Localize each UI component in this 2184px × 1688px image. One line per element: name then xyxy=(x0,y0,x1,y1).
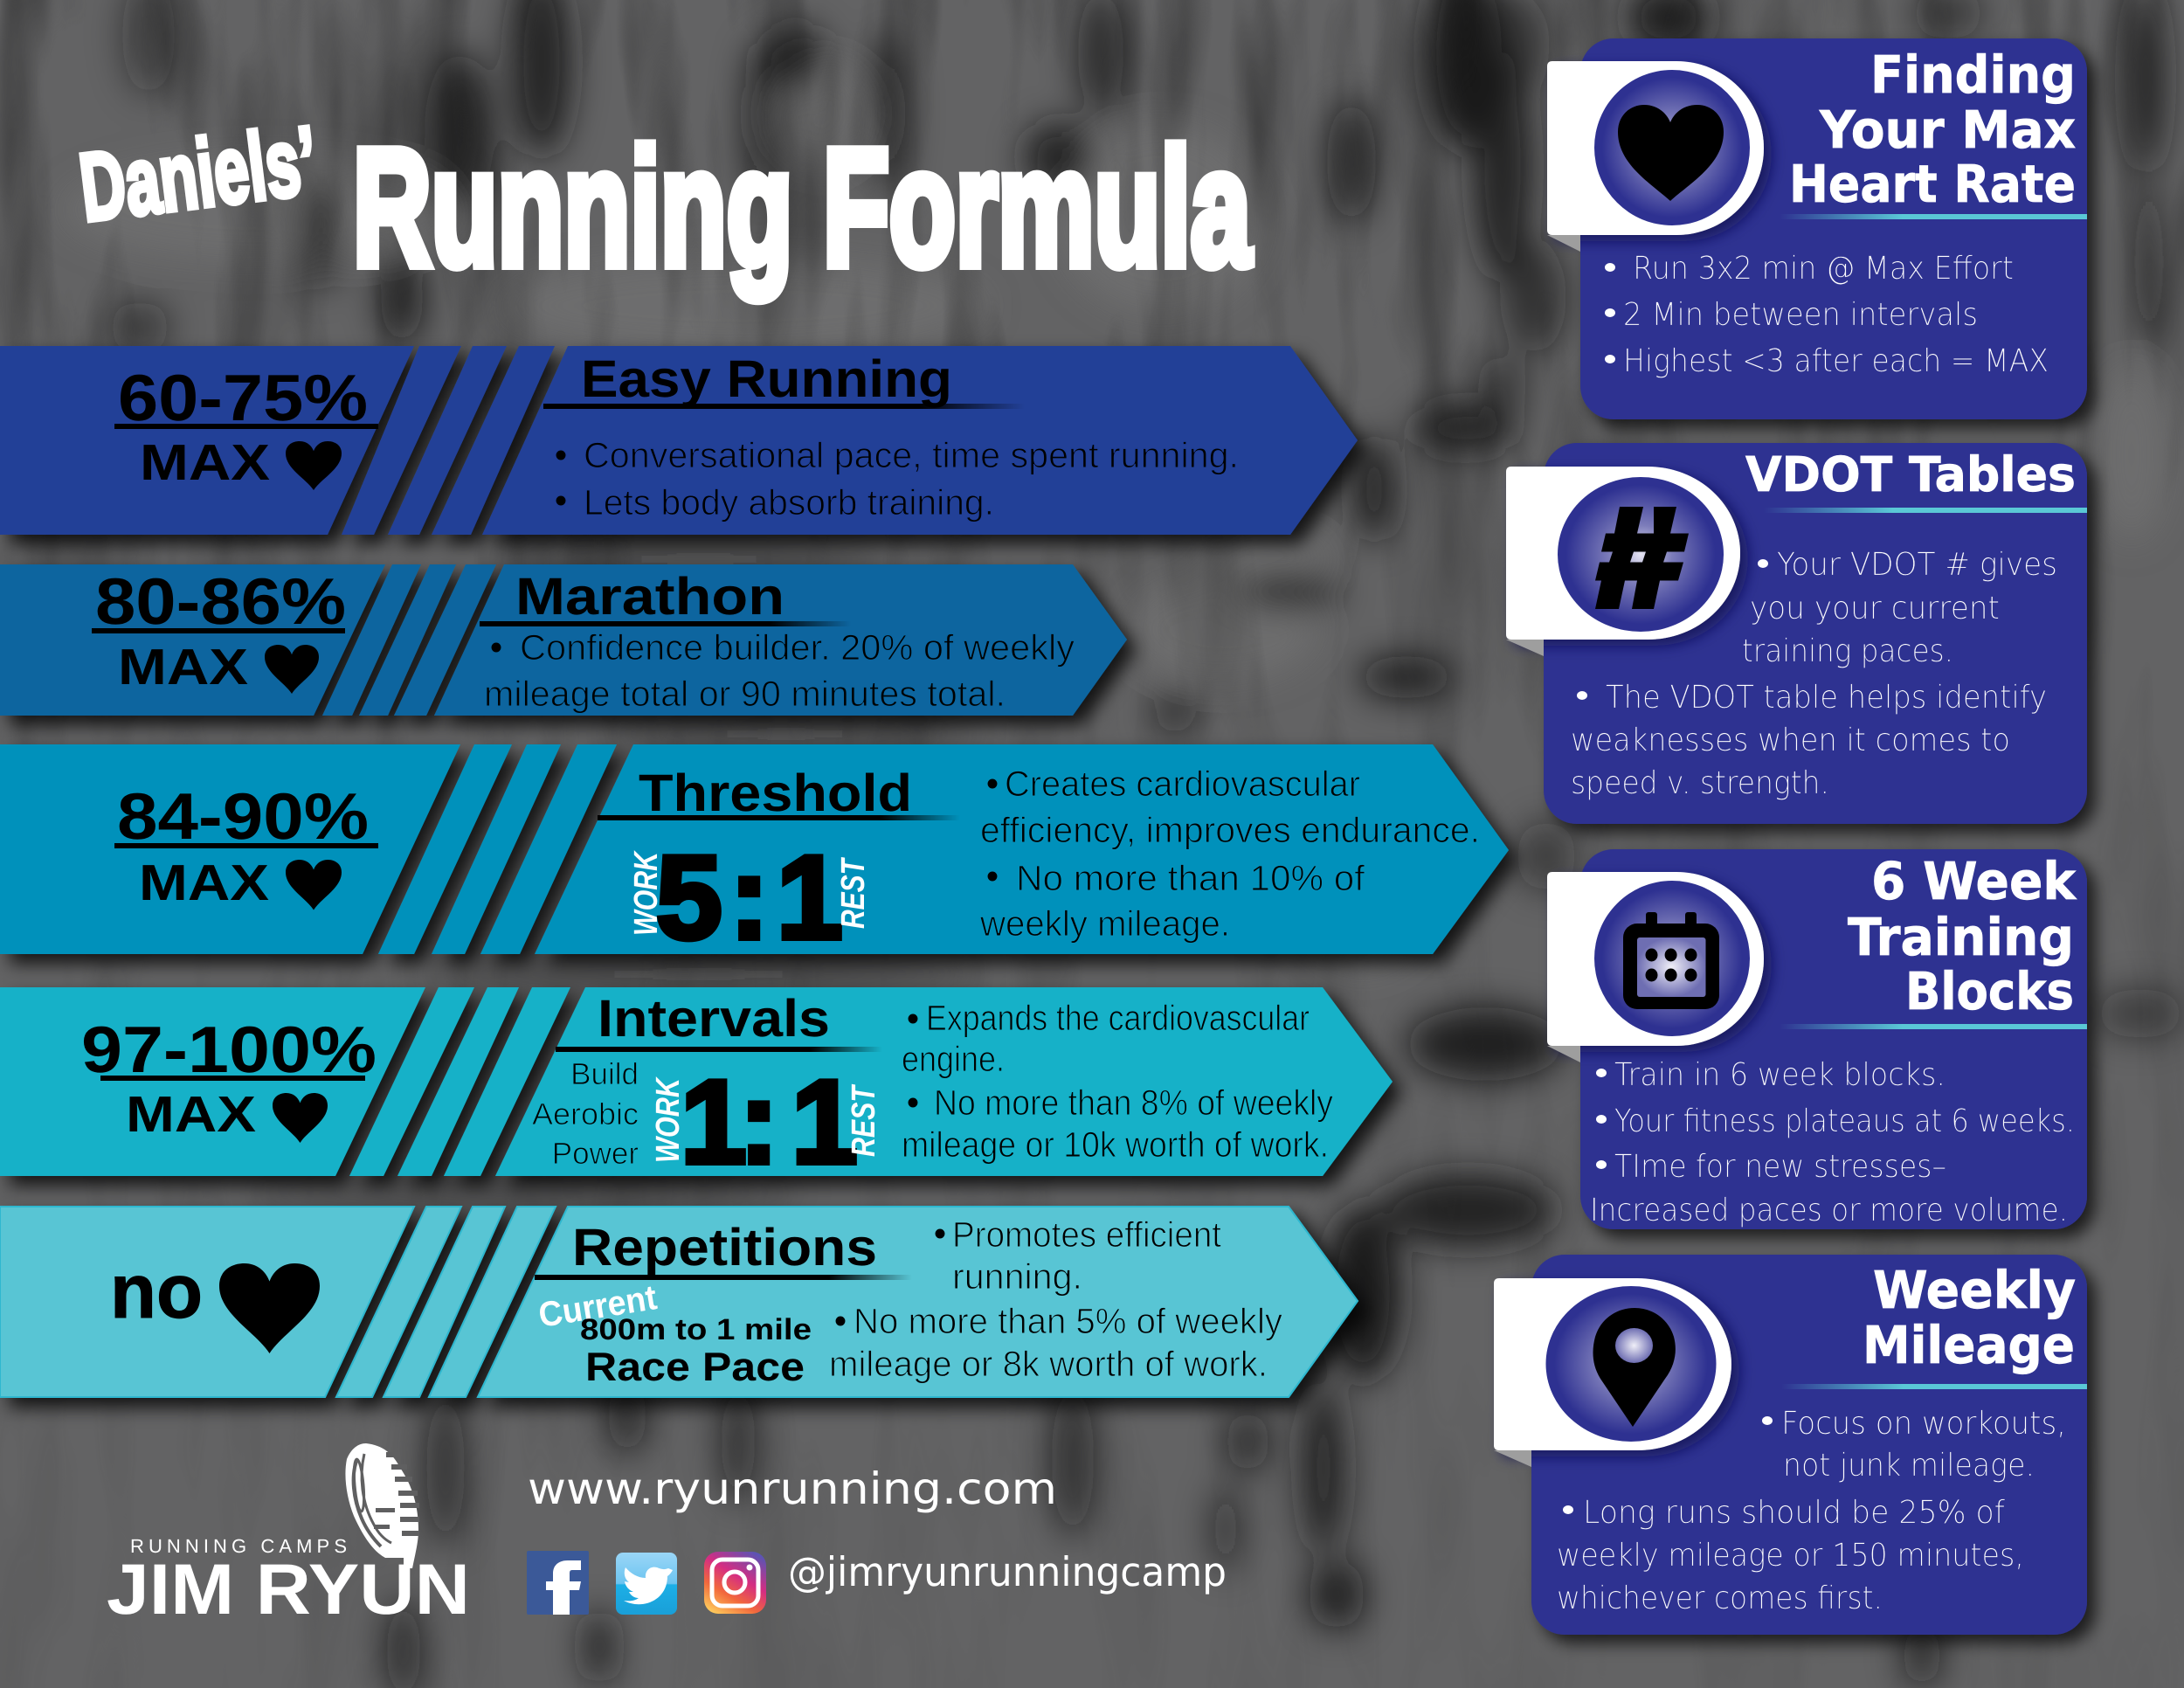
text: description: mileage or 8k worth of work. xyxy=(829,1344,1268,1384)
percentage: 60-75%: 60-75% xyxy=(118,361,368,434)
label: MAX: MAX xyxy=(126,1086,256,1143)
ratio: 5:1 work to rest: REST xyxy=(835,857,872,929)
heading xyxy=(1863,1260,2076,1375)
text: description: Your VDOT # gives xyxy=(1777,547,2057,583)
heading: Repetitions: Repetitions xyxy=(572,1218,877,1276)
panel: 6 Week Training Blocks xyxy=(1547,849,2087,1229)
text: description: TIme for new stresses– xyxy=(1614,1149,1946,1185)
percentage: 80-86%: 80-86% xyxy=(95,564,346,638)
text: description: Focus on workouts, xyxy=(1781,1406,2066,1442)
heading: Marathon: Marathon xyxy=(515,567,784,626)
label: current race pace: Current xyxy=(536,1278,660,1335)
text: description xyxy=(1571,547,2057,801)
text: description: No more than 8% of weekly xyxy=(934,1083,1333,1123)
icon: twitter xyxy=(616,1553,677,1615)
ratio: 1:1 work to rest: WORK xyxy=(650,1076,687,1163)
panel: Marathon arrow xyxy=(0,564,1127,716)
text: description xyxy=(829,1214,1282,1384)
logo: Jim Ryun Running Camps xyxy=(107,1443,470,1629)
text: description: Promotes efficient xyxy=(952,1214,1222,1255)
label: current race pace xyxy=(536,1278,812,1389)
heading: Blocks xyxy=(1905,961,2074,1021)
panel: VDOT Tables xyxy=(1506,443,2087,824)
icon: shoe sole xyxy=(345,1443,419,1568)
heading: 6 Week xyxy=(1871,851,2077,911)
panel: Repetitions arrow xyxy=(0,1207,1358,1397)
arrow shape xyxy=(0,1207,1358,1397)
label: MAX: MAX xyxy=(139,854,269,911)
heading: Mileage xyxy=(1863,1315,2075,1375)
panel: Finding Your Max Heart Rate xyxy=(1547,38,2087,419)
arrow shape xyxy=(0,987,1393,1176)
title word: Daniels': Daniels’ xyxy=(74,107,323,242)
heading xyxy=(1789,45,2076,214)
icon tab: hash xyxy=(1506,467,1740,656)
heading xyxy=(1848,851,2077,1021)
icon: facebook xyxy=(527,1551,589,1615)
panel: Easy Running arrow xyxy=(0,346,1358,535)
heading: VDOT Tables xyxy=(1745,446,2076,502)
text: description: mileage or 10k worth of work. xyxy=(902,1124,1329,1165)
text: description: No more than 5% of weekly xyxy=(854,1301,1282,1341)
text: description: Train in 6 week blocks. xyxy=(1614,1057,1946,1093)
heading: Training xyxy=(1848,907,2074,967)
text: description: speed v. strength. xyxy=(1571,765,1829,801)
text: description: Creates cardiovascular xyxy=(1005,764,1360,804)
text: description: running. xyxy=(952,1256,1082,1297)
text: description: whichever comes first. xyxy=(1557,1581,1883,1616)
text: description: efficiency, improves endurance. xyxy=(980,810,1480,850)
icon: heart xyxy=(265,645,319,694)
card xyxy=(1580,849,2087,1229)
text: description: weaknesses when it comes to xyxy=(1571,723,2010,758)
ratio: 5:1 work to rest: 5:1 xyxy=(656,831,843,964)
ratio: 1:1 work to rest: REST xyxy=(846,1084,882,1157)
text: description: Conversational pace, time spent running. xyxy=(584,435,1239,475)
text: steps: Highest <3 after each = MAX xyxy=(1623,343,2049,379)
icon tab: calendar xyxy=(1547,872,1764,1062)
label: Build Aerobic Power: Aerobic xyxy=(532,1097,639,1131)
percentage: 97-100%: 97-100% xyxy=(81,1013,377,1086)
text: description: engine. xyxy=(902,1039,1005,1079)
text: Jim Ryun: JIM RYUN xyxy=(107,1550,470,1629)
title xyxy=(74,107,1252,301)
text: description: Confidence builder. 20% of weekly xyxy=(520,627,1075,668)
arrow shape xyxy=(0,744,1509,954)
text: description: you your current xyxy=(1750,591,2000,626)
ratio: 5:1 work to rest: WORK xyxy=(628,850,665,936)
text: description xyxy=(556,435,1239,522)
card xyxy=(1544,443,2087,824)
text: description: training paces. xyxy=(1742,633,1953,669)
text: description: Lets body absorb training. xyxy=(584,482,994,522)
heading: Weekly xyxy=(1873,1260,2076,1320)
label: Build Aerobic Power: Build xyxy=(570,1057,639,1091)
panel: Threshold arrow xyxy=(0,744,1509,964)
arrow shape xyxy=(0,346,1358,535)
text: steps: 2 Min between intervals xyxy=(1623,297,1978,333)
text: Running Camps: RUNNING CAMPS xyxy=(130,1535,347,1557)
icon: instagram xyxy=(704,1552,766,1614)
icon tab: map pin xyxy=(1494,1278,1731,1467)
percentage: 84-90%: 84-90% xyxy=(117,779,369,853)
arrow shape xyxy=(0,564,1127,716)
heading: Threshold: Threshold xyxy=(639,764,912,822)
icon tab: heart xyxy=(1547,61,1764,252)
icon: heart xyxy=(286,441,342,490)
text: description: Long runs should be 25% of xyxy=(1583,1495,2005,1531)
label: Build Aerobic Power: Power xyxy=(552,1137,639,1171)
text: steps: Run 3x2 min @ Max Effort xyxy=(1633,251,2014,287)
text: description xyxy=(1590,1057,2075,1228)
text: description: The VDOT table helps identify xyxy=(1606,680,2047,716)
heading: Your Max xyxy=(1819,100,2076,160)
title words: Running Formula: Running Formula xyxy=(353,115,1252,301)
text: description xyxy=(484,627,1075,714)
text: description xyxy=(979,764,1480,944)
text: description: Increased paces or more volume. xyxy=(1590,1193,2068,1228)
text: description: No more than 10% of xyxy=(1016,858,1365,898)
label: no heart: no xyxy=(110,1248,203,1334)
text: social handle: @jimryunrunningcamp xyxy=(788,1548,1227,1595)
heading: Heart Rate xyxy=(1789,154,2076,214)
text: description xyxy=(902,998,1333,1165)
text: website: www.ryunrunning.com xyxy=(528,1463,1057,1514)
label: MAX: MAX xyxy=(140,434,270,491)
text: description: Your fitness plateaus at 6 weeks. xyxy=(1614,1103,2075,1139)
label: current race pace: 800m to 1 mile xyxy=(580,1313,812,1346)
panel: Weekly Mileage xyxy=(1494,1255,2087,1635)
label: Build Aerobic Power xyxy=(532,1057,639,1171)
icon: heart xyxy=(219,1263,320,1353)
text: description: not junk mileage. xyxy=(1783,1448,2035,1484)
text: description xyxy=(1557,1406,2066,1616)
text: description: weekly mileage. xyxy=(979,903,1230,944)
label: MAX: MAX xyxy=(118,639,248,695)
heading: Easy Running: Easy Running xyxy=(581,349,952,408)
panel: Intervals arrow xyxy=(0,987,1393,1188)
text: description: weekly mileage or 150 minutes, xyxy=(1557,1538,2024,1574)
text: description: mileage total or 90 minutes total. xyxy=(484,674,1006,714)
text: steps xyxy=(1605,251,2049,379)
card xyxy=(1580,38,2087,419)
heading: Intervals: Intervals xyxy=(598,989,830,1048)
icon: heart xyxy=(286,860,342,910)
card xyxy=(1531,1255,2087,1635)
icon: heart xyxy=(273,1093,328,1143)
text: description: Expands the cardiovascular xyxy=(926,998,1310,1038)
heading: Finding xyxy=(1870,45,2076,105)
label: current race pace: Race Pace xyxy=(585,1344,805,1389)
ratio: 1:1 work to rest: 1:1 xyxy=(681,1055,858,1188)
